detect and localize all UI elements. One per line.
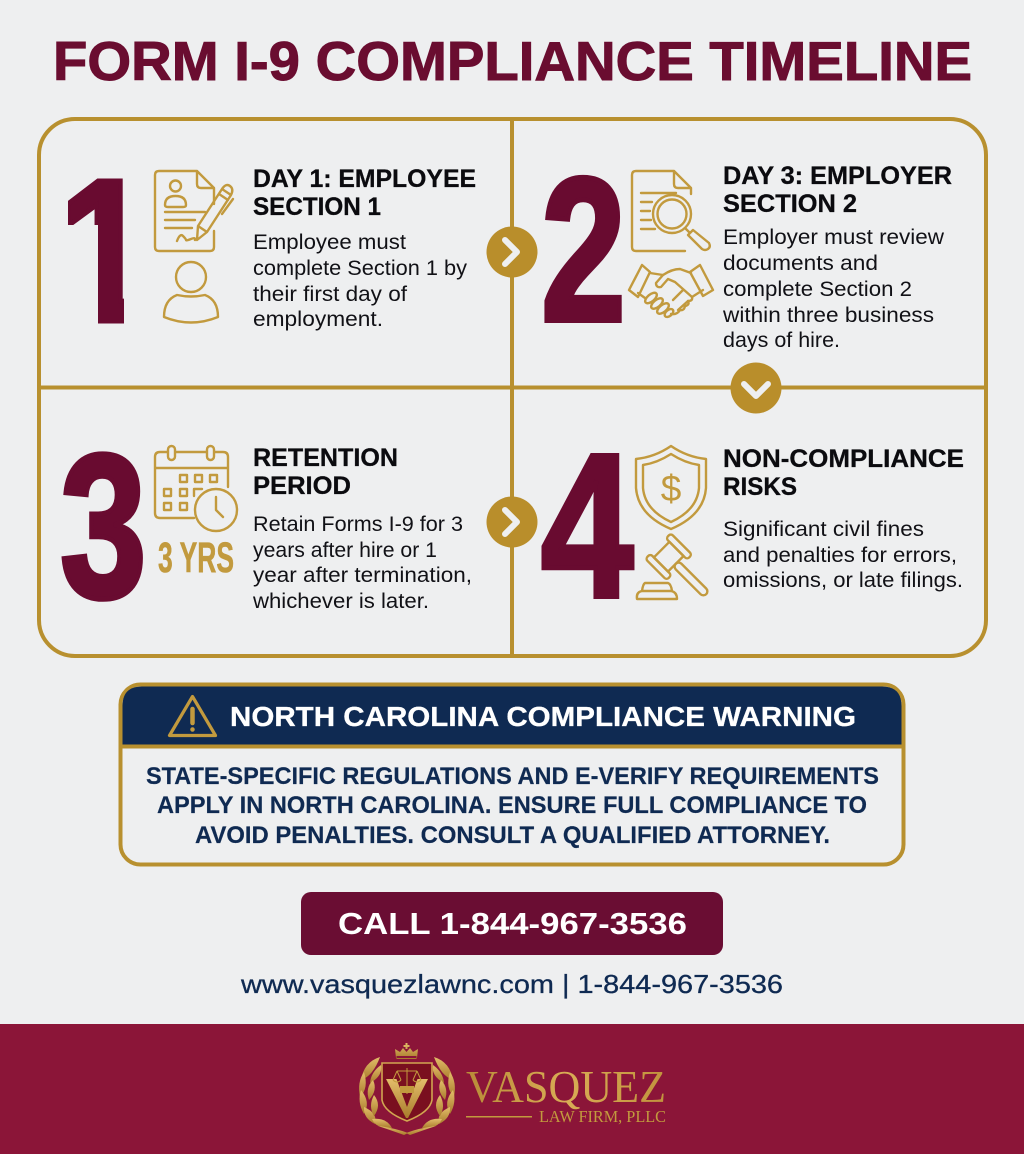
heading: RISKS [723, 473, 797, 501]
panel: step 1 [68, 169, 476, 330]
heading: NON-COMPLIANCE [723, 445, 964, 473]
body text: years after hire or 1 [253, 539, 437, 562]
warning header bar [122, 686, 902, 745]
body text: days of hire. [723, 329, 840, 352]
numeral 1: 1 [56, 138, 153, 366]
body text: year after termination, [253, 564, 472, 587]
body text: omissions, or late filings. [723, 569, 963, 592]
logo subline: LAW FIRM, PLLC [539, 1107, 666, 1126]
body text [722, 226, 945, 352]
icon: calendar and clock [155, 446, 237, 531]
body text: Significant civil fines [723, 518, 924, 541]
icon: form and pencil [155, 171, 233, 251]
icon: person [164, 262, 218, 322]
body text [253, 231, 468, 331]
numeral 2: 2 [541, 136, 626, 365]
title: FORM I-9 COMPLIANCE TIMELINE [53, 30, 972, 92]
warning text [146, 763, 879, 849]
body text: Retain Forms I-9 for 3 [253, 513, 463, 536]
numeral 3: 3 [60, 411, 147, 641]
panel: step 2 [541, 136, 952, 365]
heading [253, 165, 476, 221]
logo: Vasquez Law Firm [359, 1043, 666, 1135]
panel: step 4 [541, 411, 964, 640]
call-to-action button: CALL 1-844-967-3536 [338, 906, 687, 941]
warning heading: NORTH CAROLINA COMPLIANCE WARNING [230, 701, 856, 732]
logo laurel left [359, 1057, 408, 1135]
icon: gavel [637, 533, 719, 607]
logo crown [395, 1043, 418, 1059]
logo rule [466, 1116, 532, 1118]
body text: whichever is later. [252, 590, 429, 613]
heading [723, 162, 952, 218]
body text: employment. [253, 308, 383, 331]
logo laurel right [406, 1057, 455, 1135]
call-to-action button [301, 892, 723, 955]
warning text: APPLY IN NORTH CAROLINA. ENSURE FULL COMPLIANCE TO [157, 792, 867, 819]
panel: step 3 [60, 411, 472, 641]
warning box [120, 684, 904, 864]
icon: document with magnifier [632, 171, 710, 251]
arrow: step 1 to step 2 [486, 226, 538, 278]
logo shield [382, 1063, 432, 1121]
body text: and penalties for errors, [723, 544, 957, 567]
heading [253, 444, 398, 500]
warning text: AVOID PENALTIES. CONSULT A QUALIFIED ATTORNEY. [195, 822, 830, 849]
body text: Employee must [253, 231, 406, 254]
warning text: STATE-SPECIFIC REGULATIONS AND E-VERIFY REQUIREMENTS [146, 763, 879, 790]
contact line: www.vasquezlawnc.com | 1-844-967-3536 [240, 969, 783, 999]
body text [723, 518, 963, 592]
body text: complete Section 1 by [253, 257, 468, 280]
icon: handshake [629, 265, 713, 319]
heading: SECTION 2 [723, 190, 857, 218]
panel: North Carolina warning [120, 684, 904, 864]
timeline grid frame [39, 119, 986, 656]
footer band [0, 1024, 1024, 1154]
arrow: step 3 to step 4 [486, 496, 538, 548]
body text: documents and [723, 252, 878, 275]
heading: RETENTION [253, 444, 398, 472]
icon: warning triangle [170, 696, 216, 736]
logo wordmark: VASQUEZ [466, 1061, 666, 1112]
body text: within three business [722, 304, 934, 327]
heading: DAY 1: EMPLOYEE [253, 165, 476, 193]
icon: shield with dollar: $ [661, 468, 681, 509]
arrow: step 2 to step 4 [730, 362, 782, 414]
body text: Employer must review [723, 226, 945, 249]
body text: complete Section 2 [723, 278, 912, 301]
label: 3 YRS: 3 YRS [158, 534, 234, 582]
heading [723, 445, 964, 501]
heading: PERIOD [253, 472, 351, 500]
heading: DAY 3: EMPLOYER [723, 162, 952, 190]
body text [252, 513, 472, 613]
numeral 4: 4 [541, 411, 633, 640]
icon: shield with dollar [636, 446, 706, 529]
heading: SECTION 1 [253, 193, 381, 221]
body text: their first day of [253, 283, 407, 306]
